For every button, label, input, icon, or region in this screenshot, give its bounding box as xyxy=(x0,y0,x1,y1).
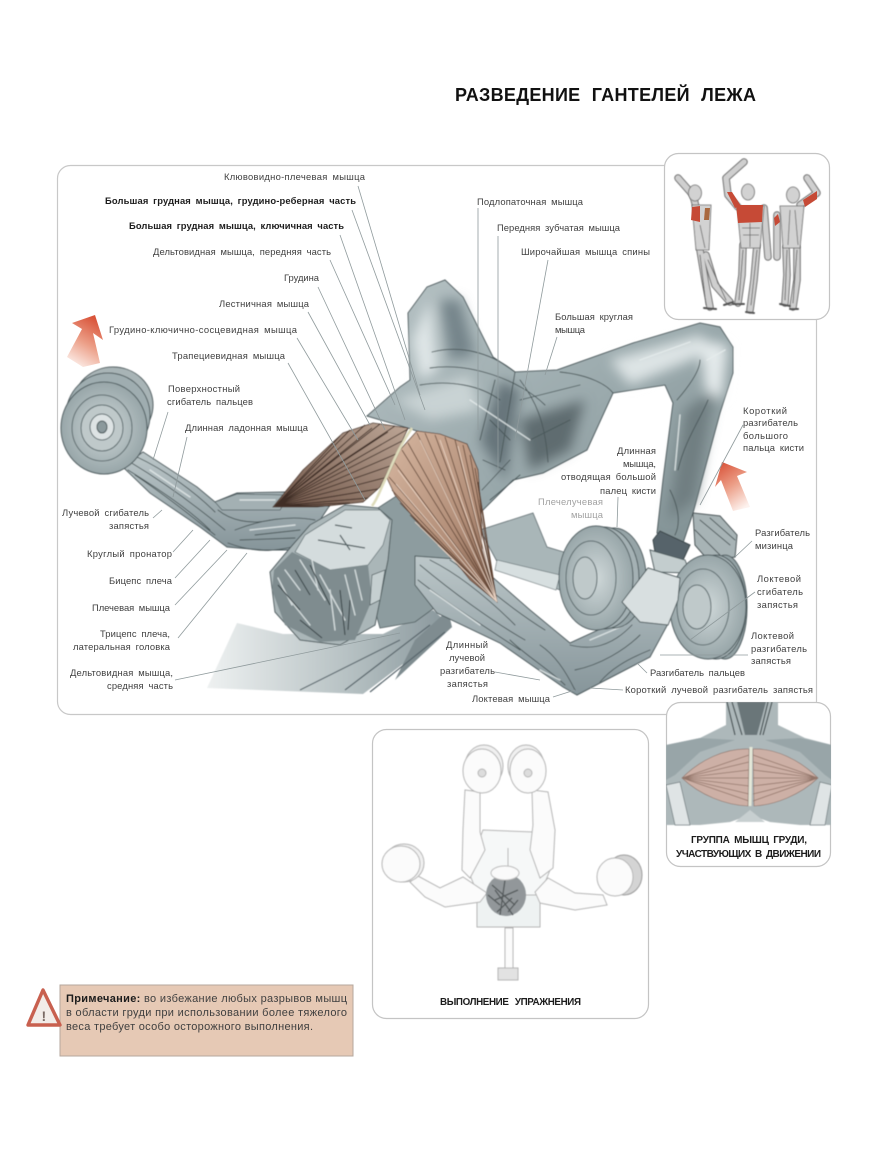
labels: left column: Дельтовидная мышца, передняя часть xyxy=(153,246,331,257)
right forearm wrist strap and fist xyxy=(650,513,737,573)
labels: left column: запястья xyxy=(109,520,149,531)
pencil figure xyxy=(382,745,642,980)
right hand gripping xyxy=(622,568,680,625)
labels: right column: палец кисти xyxy=(600,485,656,496)
labels: right column: Длинный xyxy=(446,639,488,650)
labels: right column: большого xyxy=(743,430,788,441)
arrow: upper left red xyxy=(67,315,103,367)
right pectoral muscle xyxy=(387,431,497,602)
labels: left column: Дельтовидная мышца, xyxy=(70,667,173,678)
note text: в области груди при использовании более тяжелого xyxy=(66,1007,347,1019)
icon: warning triangle: ! xyxy=(42,1008,46,1024)
labels: left column: Плечевая мышца xyxy=(92,602,171,613)
labels: right column: Локтевой xyxy=(757,573,801,584)
raised leg and torso xyxy=(367,280,733,543)
callout: note box xyxy=(60,985,353,1056)
right arm xyxy=(415,556,673,695)
execution caption: ВЫПОЛНЕНИЕ УПРАЖНЕНИЯ xyxy=(440,997,581,1008)
chest caption: ГРУППА МЫШЦ ГРУДИ, xyxy=(691,835,807,846)
labels: left column: Лестничная мышца xyxy=(219,298,310,309)
labels: right column: Плечелучевая xyxy=(538,496,603,507)
labels: left column: Большая грудная мышца, грудино-реберная часть xyxy=(105,195,356,206)
labels: left column: Грудино-ключично-сосцевидная мышца xyxy=(109,324,298,335)
panel: chest muscle group xyxy=(666,702,832,866)
labels: left column: Лучевой сгибатель xyxy=(62,507,149,518)
labels: right column: лучевой xyxy=(449,652,485,663)
labels: right column: мизинца xyxy=(755,540,794,551)
labels: right column: разгибатель xyxy=(751,643,807,654)
bench xyxy=(207,513,567,694)
figure torsos and heads xyxy=(688,184,804,250)
labels: right column: Большая круглая xyxy=(555,311,633,322)
head with hair xyxy=(486,866,526,916)
labels: left column: сгибатель пальцев xyxy=(167,396,253,407)
icon: warning triangle xyxy=(28,990,60,1025)
labels: right column: Короткий xyxy=(743,405,787,416)
head xyxy=(270,505,392,645)
leader lines xyxy=(153,186,755,697)
figures outline xyxy=(678,162,817,313)
note text: Примечание: во избежание любых разрывов мышц xyxy=(66,993,348,1005)
labels: left column xyxy=(62,171,366,691)
labels: right column: мышца xyxy=(555,324,586,335)
labels: right column: Разгибатель пальцев xyxy=(650,667,745,678)
labels: right column: разгибатель xyxy=(743,417,798,428)
chest illustration xyxy=(666,702,832,825)
labels: right column: запястья xyxy=(757,599,798,610)
labels: right column: Локтевой xyxy=(751,630,794,641)
title: РАЗВЕДЕНИЕ ГАНТЕЛЕЙ ЛЕЖА xyxy=(455,84,756,105)
labels: right column: пальца кисти xyxy=(743,442,804,453)
labels: left column: Длинная ладонная мышца xyxy=(185,422,309,433)
labels: right column: отводящая большой xyxy=(561,471,656,482)
labels: right column: Локтевая мышца xyxy=(472,693,551,704)
note text: веса требует особо осторожного выполнения. xyxy=(66,1021,313,1033)
labels: left column: Грудина xyxy=(284,272,320,283)
labels: right column: Короткий лучевой разгибатель запястья xyxy=(625,684,813,695)
panel: exercise execution xyxy=(372,730,648,1018)
near dumbbell in raised hand xyxy=(559,526,687,630)
labels: right column: Широчайшая мышца спины xyxy=(521,246,650,257)
labels: right column: мышца, xyxy=(623,458,656,469)
labels: left column: Трапециевидная мышца xyxy=(172,350,286,361)
labels: right column: запястья xyxy=(751,655,791,666)
labels: right column: Длинная xyxy=(617,445,656,456)
arrow: right red xyxy=(715,462,750,511)
labels: right column: запястья xyxy=(447,678,488,689)
panel: three standing figures xyxy=(664,154,830,320)
labels: right column xyxy=(440,196,813,704)
left pectoral muscle xyxy=(273,423,408,507)
labels: right column: Разгибатель xyxy=(755,527,810,538)
labels: left column: Круглый пронатор xyxy=(87,548,172,559)
labels: left column: Бицепс плеча xyxy=(109,575,173,586)
figure active muscles highlighted xyxy=(691,191,817,226)
torso muscle lines xyxy=(420,342,725,535)
labels: right column: Передняя зубчатая мышца xyxy=(497,222,621,233)
labels: left column: средняя часть xyxy=(107,680,173,691)
illustration: bench press figure xyxy=(61,280,747,695)
labels: left column: Поверхностный xyxy=(168,383,240,394)
labels: right column: разгибатель xyxy=(440,665,495,676)
labels: left column: Большая грудная мышца, ключичная часть xyxy=(129,220,344,231)
torso shading xyxy=(395,300,728,520)
left arm xyxy=(123,452,330,550)
far dumbbell xyxy=(670,555,747,659)
panel: chest muscle group: УЧАСТВУЮЩИХ В ДВИЖЕНИИ xyxy=(676,849,821,860)
labels: right column: Подлопаточная мышца xyxy=(477,196,584,207)
labels: left column: латеральная головка xyxy=(73,641,171,652)
neck and trapezius xyxy=(372,495,450,628)
note text xyxy=(66,993,348,1033)
left dumbbell xyxy=(61,367,153,474)
labels: left column: Клювовидно-плечевая мышца xyxy=(224,171,366,182)
labels: left column: Трицепс плеча, xyxy=(100,628,170,639)
labels: right column: мышца xyxy=(571,509,604,520)
labels: right column: сгибатель xyxy=(757,586,803,597)
panel: main anatomy frame xyxy=(58,166,816,714)
sternum xyxy=(372,428,412,506)
